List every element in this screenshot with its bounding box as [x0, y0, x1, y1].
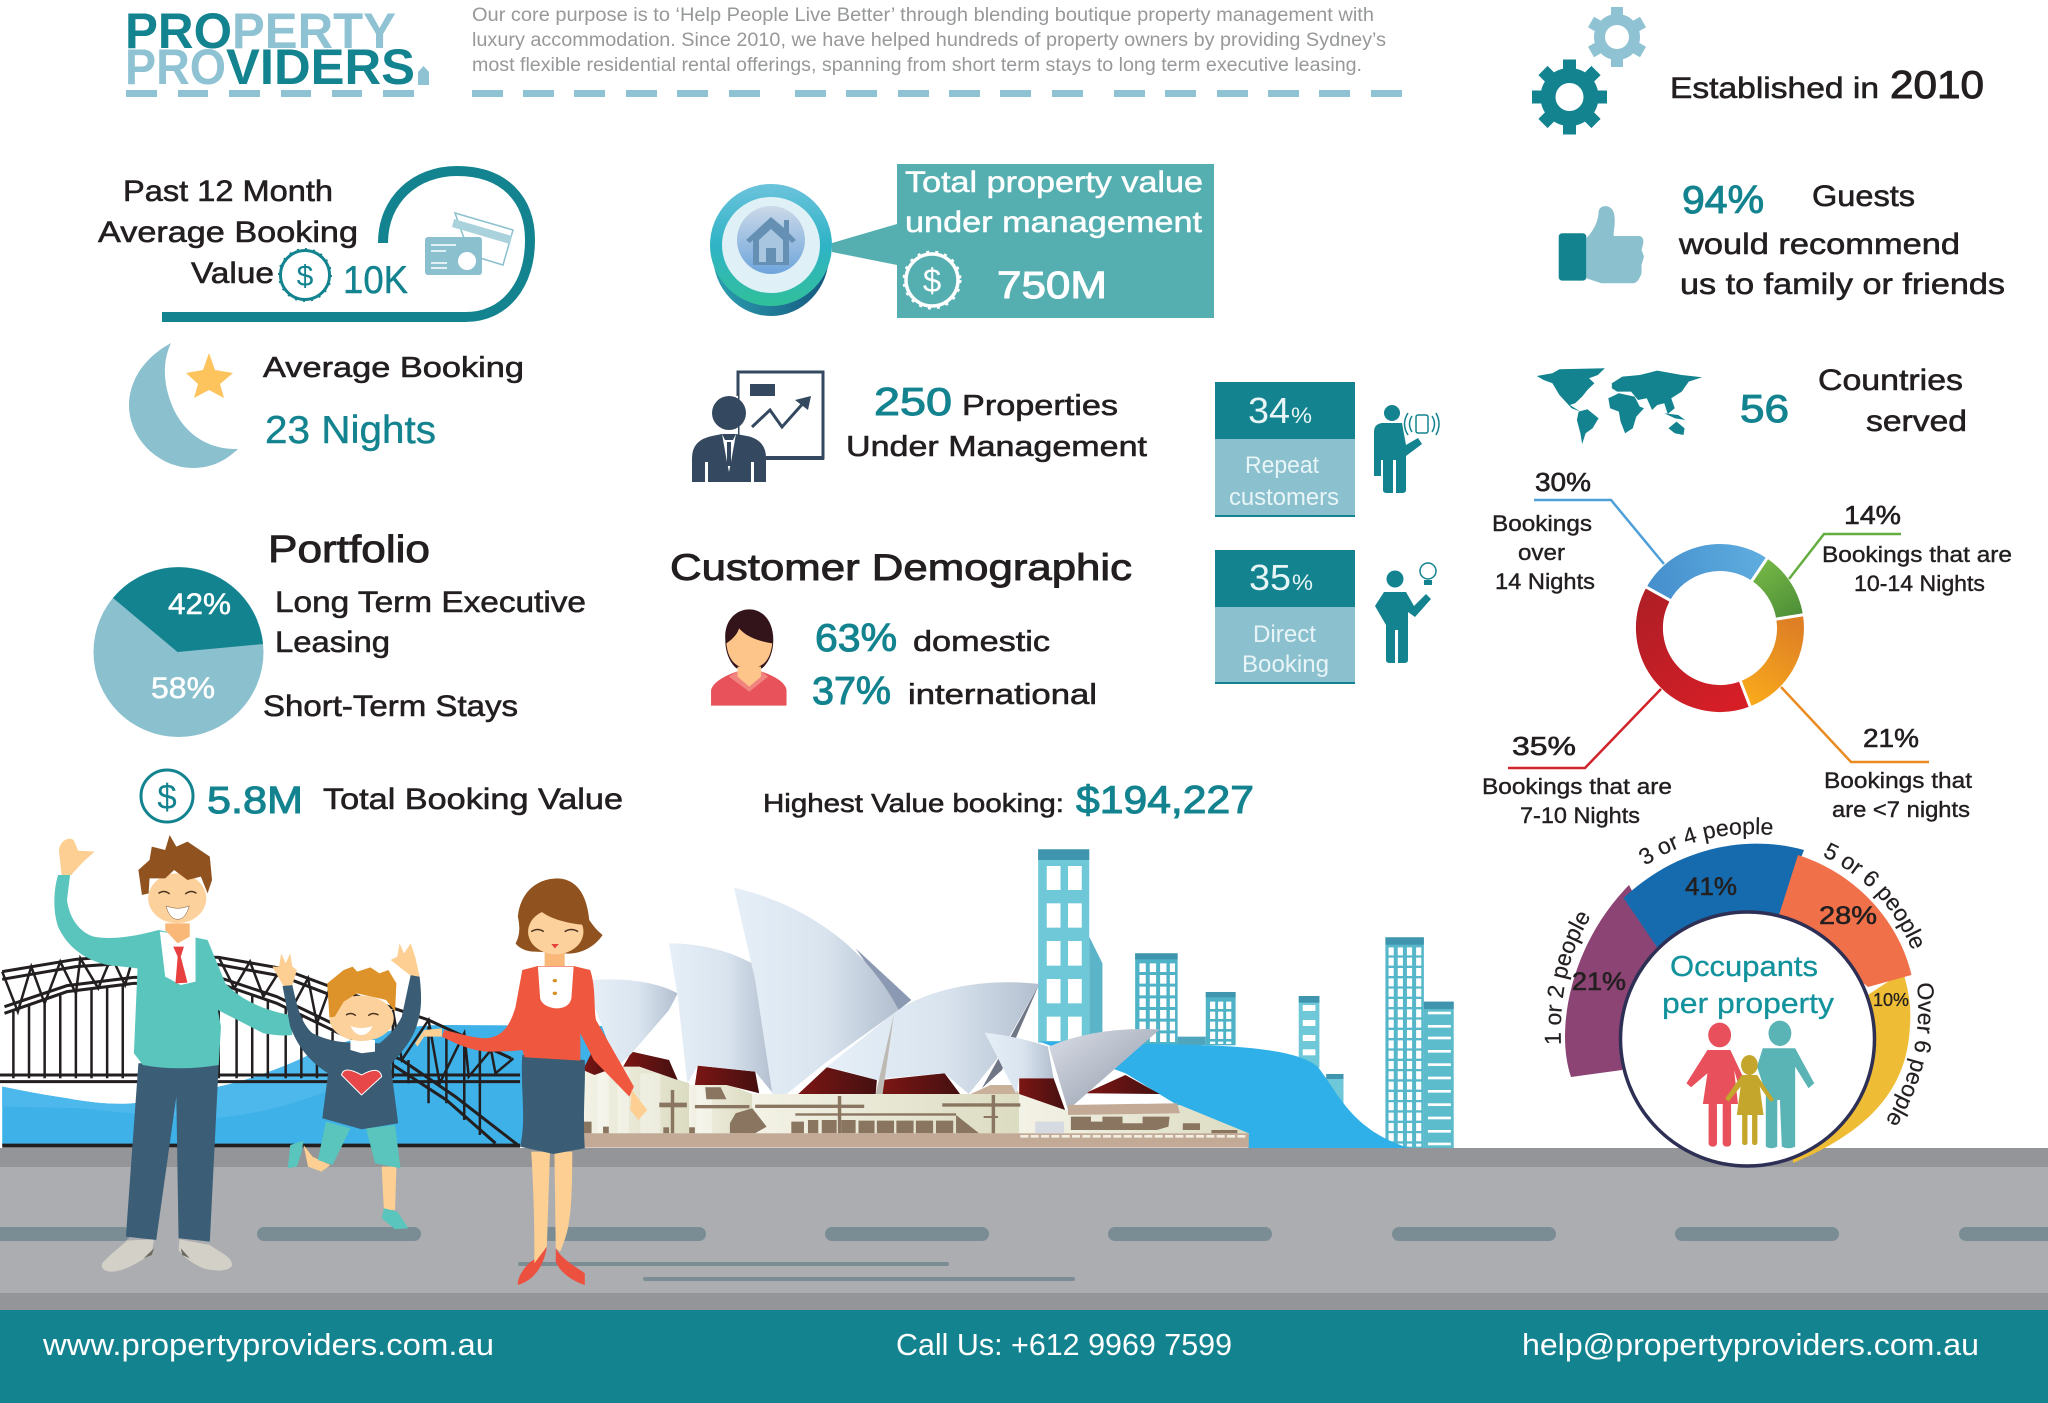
icon: gears: [1532, 7, 1646, 134]
label: 21 percent: [1824, 723, 1972, 822]
recommendation text: us to family or friends: [1680, 268, 2005, 301]
recommendation text: [1678, 179, 2005, 301]
label: 30 percent: Bookings: [1492, 511, 1592, 536]
stat card: direct booking: %: [1292, 570, 1313, 595]
established label: 2010: [1890, 64, 1984, 107]
panel: average booking value: 10K: [343, 259, 408, 302]
icon: dollar coin: $: [297, 260, 314, 293]
label: 35 percent: 35%: [1512, 731, 1576, 761]
character: boy: [272, 943, 421, 1229]
scene: Sydney Opera House: [583, 888, 1249, 1148]
panel: average booking nights: Average Booking: [263, 352, 524, 384]
total booking value: [141, 770, 623, 822]
pie chart: 58%: [151, 672, 215, 705]
panel: average booking nights: 23 Nights: [265, 409, 436, 452]
panel: average booking value: Value: [191, 257, 274, 290]
icon: presenter with chart: [692, 372, 824, 482]
label: 35 percent: Bookings that are: [1482, 774, 1672, 799]
panel: portfolio pie: Portfolio: [268, 529, 430, 571]
stat card: repeat customers: %: [1291, 403, 1312, 428]
label: 35 percent: [1482, 731, 1672, 828]
panel: portfolio pie: [94, 529, 586, 737]
panel: customer demographic: [670, 547, 1132, 713]
panel: average booking value: Past 12 Month: [123, 175, 333, 208]
label: 14 percent: 14%: [1844, 500, 1901, 530]
character: father: [54, 835, 292, 1272]
stat card: direct booking: Direct: [1253, 621, 1316, 648]
label: 21 percent: are <7 nights: [1832, 797, 1970, 822]
radial chart: occupants per property: 21%: [1572, 968, 1626, 996]
panel: properties under management: 250: [874, 381, 952, 424]
icon: world map: [1537, 368, 1702, 444]
stat card: direct booking: [1215, 550, 1355, 684]
stat card: repeat customers: Repeat: [1245, 452, 1319, 479]
label: 14 percent: [1822, 500, 2012, 596]
panel: customer demographic: Customer Demographic: [670, 547, 1132, 588]
logo: [125, 3, 429, 97]
countries served: Countries: [1818, 364, 1963, 397]
panel: properties under management: [692, 372, 1147, 482]
footer website: www.propertyproviders.com.au: [42, 1327, 494, 1362]
scene: harbour water: [2, 1025, 609, 1145]
radial chart: occupants per property: 1 or 2 people: [1544, 912, 1590, 1044]
panel: portfolio pie: Leasing: [275, 626, 390, 659]
panel: portfolio pie: Short-Term Stays: [263, 690, 518, 723]
label: 30 percent: over: [1518, 540, 1565, 565]
icon: woman avatar: [711, 609, 787, 706]
stat card: repeat customers: 34: [1248, 390, 1290, 431]
countries served: 56: [1740, 388, 1789, 431]
icon: man with light bulb: [1375, 563, 1436, 663]
label: 21 percent: 21%: [1863, 723, 1919, 753]
panel: portfolio pie: Long Term Executive: [275, 586, 586, 619]
footer email: help@propertyproviders.com.au: [1522, 1327, 1979, 1362]
label: 14 percent: 10-14 Nights: [1854, 571, 1985, 596]
radial chart: occupants per property: 10%: [1873, 990, 1909, 1010]
radial chart: occupants per property: 28%: [1819, 902, 1877, 930]
radial chart: occupants per property: per property: [1662, 988, 1835, 1020]
stat card: repeat customers: [1215, 382, 1355, 517]
leader lines: [1508, 500, 1929, 768]
panel: total property value callout: [710, 164, 1214, 318]
logo: PERTY: [232, 3, 396, 59]
scene: city skyline towers: [1038, 849, 1454, 1149]
label: 30 percent: 30%: [1535, 467, 1591, 497]
panel: properties under management: Under Management: [846, 431, 1147, 463]
label: 30 percent: [1492, 467, 1595, 594]
footer phone: Call Us: +612 9969 7599: [896, 1327, 1232, 1362]
total booking value: 5.8M: [207, 780, 303, 822]
countries served: [1740, 364, 1967, 438]
wedge 5 or 6 people: [1779, 855, 1912, 987]
panel: customer demographic: international: [908, 679, 1097, 711]
rounded arc frame: [162, 171, 530, 317]
countries served: served: [1866, 405, 1967, 438]
recommendation text: would recommend: [1678, 228, 1960, 261]
logo: PRO: [125, 39, 226, 95]
highest value booking: $194,227: [1076, 779, 1254, 822]
label: 35 percent: 7-10 Nights: [1520, 803, 1640, 828]
icon: dollar circle: $: [157, 778, 177, 817]
scene: Sydney Harbour Bridge: [0, 955, 520, 1146]
radial chart: occupants per property: Occupants: [1670, 951, 1818, 983]
recommendation text: 94%: [1682, 179, 1764, 222]
wedge over 6 people: [1790, 972, 1910, 1163]
stat card: direct booking: 35: [1249, 557, 1291, 598]
icon: star: [186, 353, 233, 398]
center circle: [1620, 912, 1874, 1166]
radial chart: occupants per property: [1544, 817, 1934, 1168]
panel: average booking nights: [129, 343, 524, 468]
radial chart: occupants per property: 41%: [1685, 873, 1737, 901]
panel: customer demographic: domestic: [913, 626, 1050, 658]
radial chart: occupants per property: 3 or 4 people: [1639, 817, 1772, 864]
wedge 3 or 4 people: [1624, 844, 1804, 950]
icon: moon: [129, 343, 238, 468]
pie chart: 42%: [168, 588, 231, 621]
label: 21 percent: Bookings that: [1824, 768, 1972, 793]
donut chart: booking length: [1482, 467, 2012, 828]
radial chart: occupants per property: Over 6 people: [1887, 983, 1934, 1125]
highest value booking: Highest Value booking:: [763, 788, 1064, 818]
panel: customer demographic: 37%: [812, 670, 891, 713]
panel: customer demographic: 63%: [815, 617, 897, 660]
icon: dollar coin: $: [923, 262, 941, 299]
icon: man with phone: [1374, 405, 1439, 493]
wedge 1 or 2 people: [1565, 885, 1659, 1077]
icon: house button: [710, 184, 832, 316]
intro paragraph: luxury accommodation. Since 2010, we have helped hundreds of property owners by providing Sydney’s: [472, 30, 1386, 51]
panel: properties under management: Properties: [962, 390, 1118, 422]
label: 14 percent: Bookings that are: [1822, 542, 2012, 567]
intro paragraph: most flexible residential rental offerings, spanning from short term stays to long term executive leasing.: [472, 55, 1362, 76]
footer bar: [0, 1310, 2048, 1403]
intro paragraph: [472, 5, 1402, 97]
panel: average booking value: Average Booking: [98, 216, 358, 249]
callout pointer: [832, 224, 897, 265]
logo: PRO: [125, 3, 232, 59]
icon: dollar coin: [904, 252, 960, 308]
callout box: [897, 164, 1214, 318]
established label: Established in: [1670, 72, 1879, 105]
stat card: direct booking: Booking: [1242, 651, 1329, 678]
road surface: [0, 1148, 2048, 1310]
logo: VIDERS: [226, 39, 415, 95]
character: mother: [415, 878, 647, 1285]
icon: dollar circle: [141, 770, 193, 822]
pie chart: [94, 567, 264, 737]
recommendation text: Guests: [1812, 180, 1915, 213]
scene: right harbour water: [1039, 1042, 1410, 1148]
intro paragraph: Our core purpose is to ‘Help People Live Better’ through blending boutique property management with: [472, 5, 1374, 26]
icon: credit cards: [425, 213, 513, 275]
panel: average booking value: [98, 171, 530, 317]
panel: total property value callout: 750M: [997, 265, 1107, 307]
radial chart: occupants per property: 5 or 6 people: [1824, 842, 1922, 949]
label: 30 percent: 14 Nights: [1495, 569, 1595, 594]
icon: thumbs up: [1559, 206, 1644, 283]
panel: total property value callout: under management: [905, 206, 1203, 239]
established label: [1670, 64, 1984, 107]
icon: family: [1686, 1021, 1814, 1148]
highest value booking: [763, 779, 1254, 822]
panel: total property value callout: Total property value: [905, 166, 1203, 199]
total booking value: Total Booking Value: [323, 783, 623, 816]
icon: dollar coin: [280, 250, 330, 300]
stat card: repeat customers: customers: [1229, 484, 1339, 511]
